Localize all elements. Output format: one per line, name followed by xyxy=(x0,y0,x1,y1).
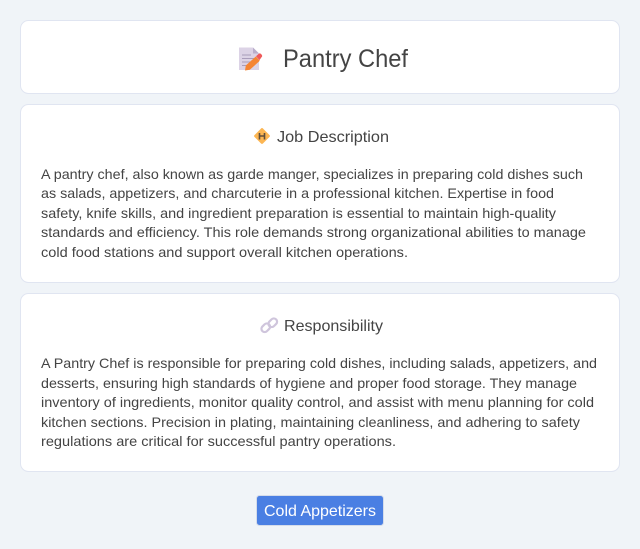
responsibility text: regulations are critical for successful pantry operations. xyxy=(41,433,396,449)
icon: chain link xyxy=(260,317,278,333)
heading: job description xyxy=(254,128,389,146)
job description text: as salads, appetizers, and charcuterie in a professional kitchen. Expertise in food xyxy=(41,185,554,201)
panel: responsibility xyxy=(20,294,620,472)
job description text: safety, knife skills, and ingredient preparation is essential to maintain high-quality xyxy=(41,205,556,221)
panel: title xyxy=(20,20,620,94)
responsibility text: A Pantry Chef is responsible for preparing cold dishes, including salads, appetizers, and xyxy=(41,355,597,371)
responsibility text: desserts, ensuring high standards of hygiene and proper food storage. They manage xyxy=(41,375,577,391)
job description text xyxy=(41,166,586,260)
panel: job description xyxy=(20,104,620,282)
responsibility text: inventory of ingredients, monitor quality control, and assist with menu planning for cold xyxy=(41,394,594,410)
heading: responsibility xyxy=(260,317,383,335)
job description text: A pantry chef, also known as garde manger, specializes in preparing cold dishes such xyxy=(41,166,583,182)
responsibility text xyxy=(41,355,597,449)
responsibility text: kitchen sections. Precision in plating, maintaining cleanliness, and adhering to safety xyxy=(41,414,580,430)
job description text: cold food stations and support overall kitchen operations. xyxy=(41,244,408,260)
job description heading text: Job Description xyxy=(277,129,389,146)
icon: orange diamond sign xyxy=(254,128,270,144)
icon: document with pencil xyxy=(239,48,262,70)
job description text: standards and efficiency. This role demands strong organizational abilities to manage xyxy=(41,224,586,240)
tag button: cold appetizers xyxy=(256,496,384,526)
responsibility heading text: Responsibility xyxy=(284,318,383,335)
button label: Cold Appetizers xyxy=(264,503,376,520)
title text: Pantry Chef xyxy=(283,45,408,73)
